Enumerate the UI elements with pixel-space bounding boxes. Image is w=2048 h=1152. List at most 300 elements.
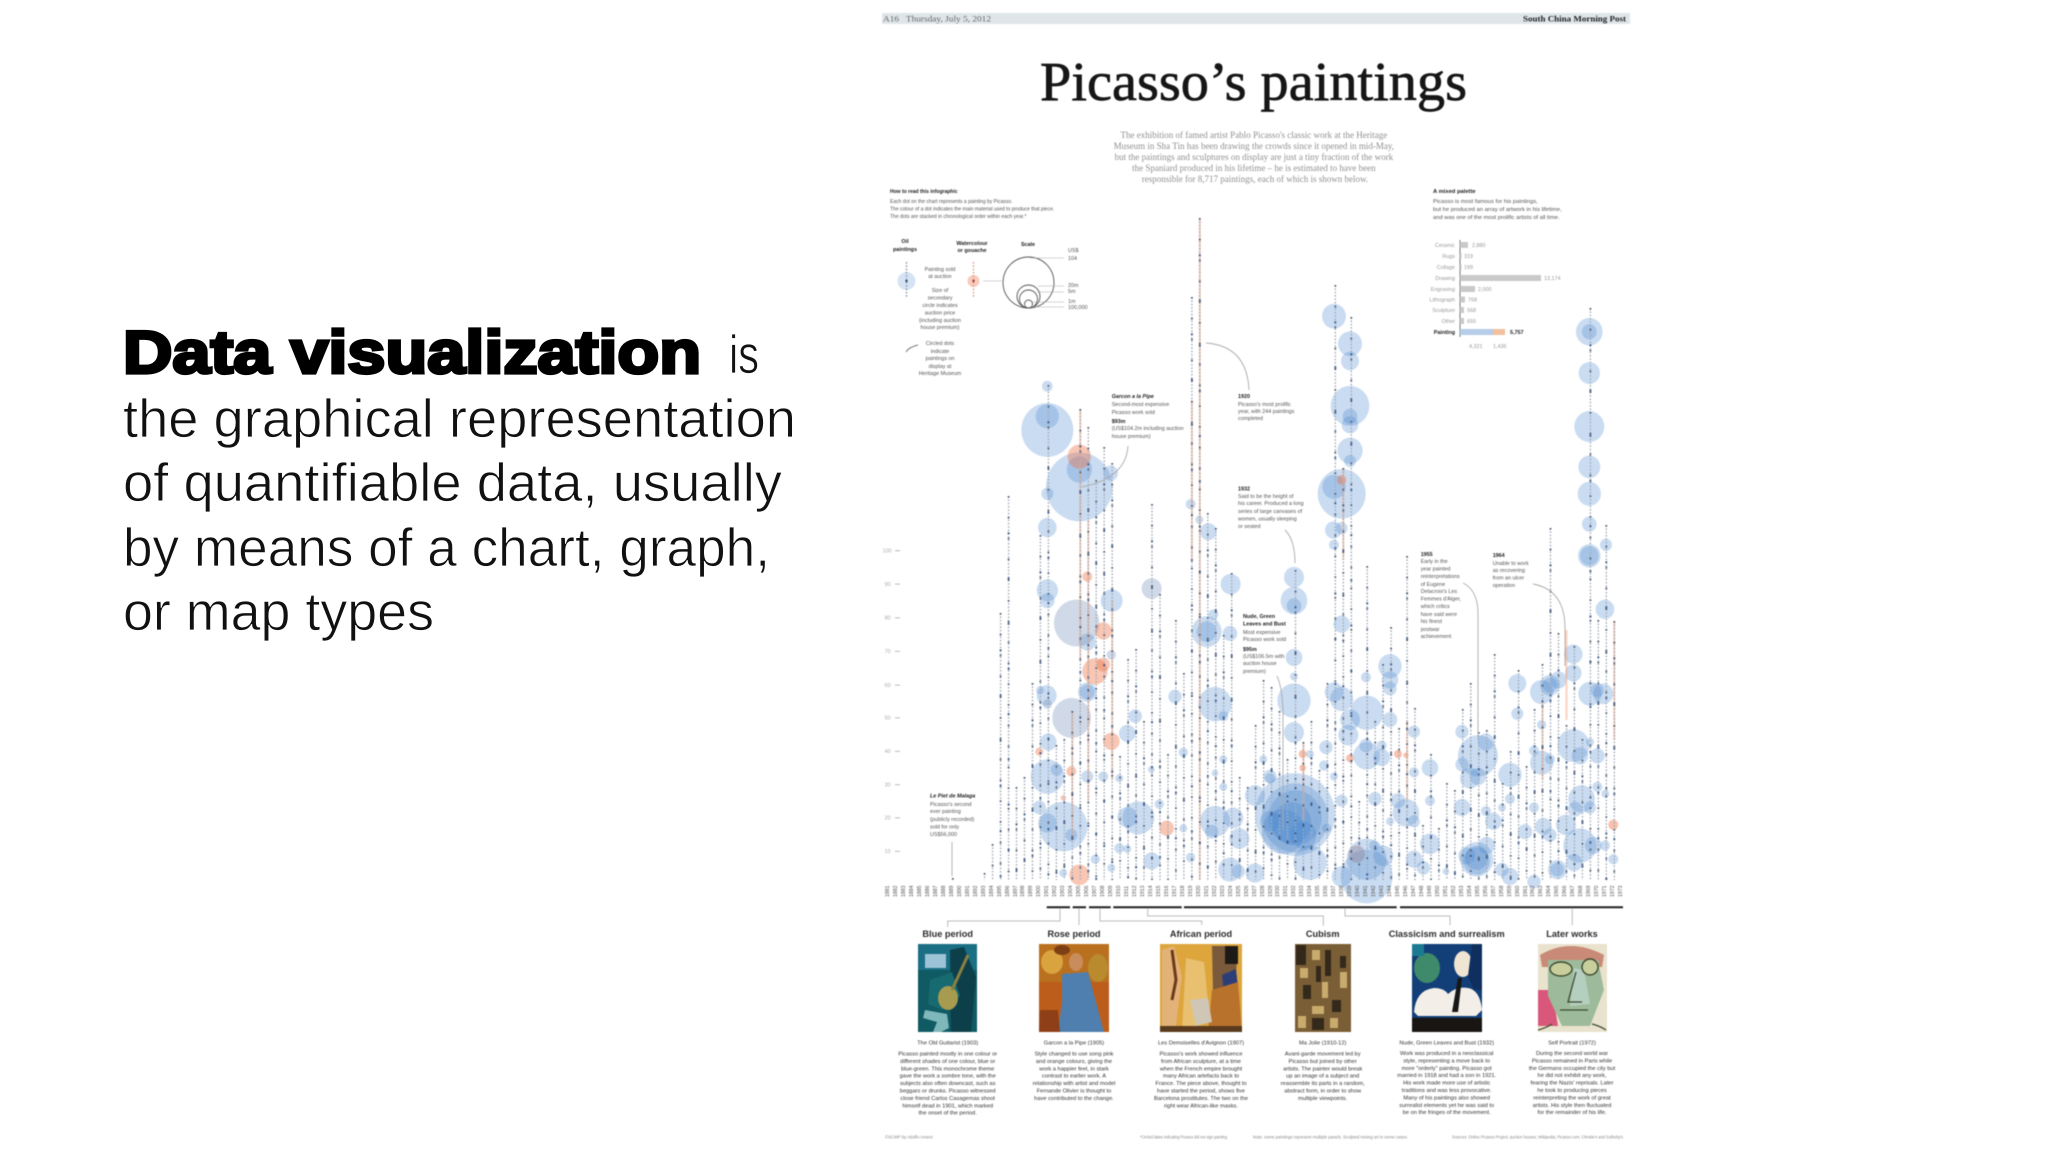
newspaper header bar xyxy=(882,13,1630,24)
year axis labels: 1971 xyxy=(1602,885,1608,897)
callout: Garcon a la Pipe xyxy=(1082,394,1184,487)
description: he took to producing pieces xyxy=(1537,1088,1607,1094)
callout: Le Piet de Malaga: US$56,000 xyxy=(930,832,957,838)
year axis labels: 1901 xyxy=(1044,885,1050,897)
description: Many of his paintings also showed xyxy=(1403,1095,1490,1101)
description: During the second world war xyxy=(1536,1051,1608,1057)
callout: 1964: 1964 xyxy=(1493,553,1505,559)
bar labels: Ceramic xyxy=(1435,243,1455,249)
icon: watercolour dot xyxy=(968,262,980,298)
year axis labels: 1965 xyxy=(1554,885,1560,897)
callout: 1920: year, with 244 paintings xyxy=(1238,409,1295,415)
year axis labels: 1962 xyxy=(1530,885,1536,897)
arrow: 1932 xyxy=(1285,530,1295,563)
callout: 1955: achievement xyxy=(1421,634,1452,640)
description: have contributed to the change. xyxy=(1034,1096,1114,1102)
description: have started the period, shows five xyxy=(1157,1088,1245,1094)
description: relationship with artist and model xyxy=(1033,1081,1115,1087)
year axis labels: 1916 xyxy=(1164,885,1170,897)
description: when the French empire brought xyxy=(1159,1066,1243,1072)
callout: Nude, Green Leaves and Bust: premium) xyxy=(1243,669,1266,675)
year axis labels: 1882 xyxy=(893,885,899,897)
description: the onset of the period. xyxy=(919,1111,977,1117)
callout: Nude, Green Leaves and Bust: (US$106.5m with xyxy=(1243,654,1284,660)
callout: Nude, Green Leaves and Bust: $95m xyxy=(1243,647,1257,653)
description: subjects also often downcast, such as xyxy=(900,1081,996,1087)
bar labels: Painting xyxy=(1434,330,1455,336)
description: and orange colours, giving the xyxy=(1036,1059,1112,1065)
description: Fernande Olivier is thought to xyxy=(1037,1088,1111,1094)
panel: African period xyxy=(1154,929,1248,1109)
description: different shades of one colour, blue or xyxy=(900,1059,995,1065)
year axis labels: 1898 xyxy=(1020,885,1026,897)
description: Work was produced in a neoclassical xyxy=(1400,1051,1493,1057)
painting: Ma Jolie xyxy=(1295,944,1351,1032)
arrow: 1964 xyxy=(1533,584,1565,666)
callout: 1964 xyxy=(1493,553,1565,666)
description: artists. The painter would break xyxy=(1283,1066,1362,1072)
mixed palette text: and was one of the most prolific artists of all time. xyxy=(1433,215,1560,221)
secondary circles: price bubbles right xyxy=(1255,304,1618,903)
description: reassemble its parts in a random, xyxy=(1281,1081,1365,1087)
year axis labels: 1963 xyxy=(1538,885,1544,897)
y axis: 100 xyxy=(883,548,892,554)
bar labels: Rugs xyxy=(1442,254,1455,260)
bold term: Data visualization xyxy=(123,319,701,386)
description: from African sculpture, at a time xyxy=(1161,1059,1241,1065)
callout: Le Piet de Malaga: sold for only xyxy=(930,824,959,830)
year axis labels: 1886 xyxy=(925,885,931,897)
description: surrealist elements yet he was said to xyxy=(1399,1103,1494,1109)
painting: Self Portrait xyxy=(1538,944,1607,1032)
definition line 4: by means of a chart, graph, xyxy=(123,518,770,578)
newspaper header bar: A16 Thursday, July 5, 2012 xyxy=(883,14,991,24)
description: Picasso but joined by other xyxy=(1289,1059,1357,1065)
year axis labels: 1902 xyxy=(1052,885,1058,897)
y axis: 80 xyxy=(885,616,891,622)
callout: Le Piet de Malaga: Le Piet de Malaga xyxy=(930,794,975,800)
scale circles xyxy=(983,257,1064,308)
intro text: Museum in Sha Tin has been drawing the crowds since it opened in mid-May, xyxy=(1114,141,1394,151)
bar labels: Engraving xyxy=(1431,287,1455,293)
year axis labels: 1883 xyxy=(901,885,907,897)
year axis labels: 1938 xyxy=(1339,885,1345,897)
year axis labels: 1926 xyxy=(1244,885,1250,897)
heading: African period xyxy=(1170,929,1232,939)
description: Picasso's work showed influence xyxy=(1160,1052,1242,1058)
scale labels: 1m xyxy=(1068,299,1076,305)
year axis labels: 1954 xyxy=(1467,885,1473,897)
callout: 1955: year painted xyxy=(1421,567,1450,573)
legend notes: auction price xyxy=(925,310,955,316)
year axis labels: 1940 xyxy=(1355,885,1361,897)
caption: The Old Guitarist (1903) xyxy=(917,1040,978,1046)
description: Picasso remained in Paris while xyxy=(1532,1058,1612,1064)
legend headings: Scale xyxy=(1021,242,1035,248)
year axis labels: 1928 xyxy=(1260,885,1266,897)
description: the Germans occupied the city but xyxy=(1529,1066,1616,1072)
bar values: 13,174 xyxy=(1544,276,1560,282)
description: more "orderly" painting. Picasso got xyxy=(1402,1066,1492,1072)
year axis labels: 1929 xyxy=(1268,885,1274,897)
scale labels: 20m xyxy=(1068,283,1079,289)
year axis labels: 1897 xyxy=(1012,885,1018,897)
year axis labels: 1918 xyxy=(1180,885,1186,897)
light blue bubbles right xyxy=(1255,304,1618,903)
year axis labels: 1945 xyxy=(1395,885,1401,897)
year axis labels: 1934 xyxy=(1307,885,1313,897)
bar values: 2,880 xyxy=(1472,243,1486,249)
year axis labels: 1919 xyxy=(1188,885,1194,897)
light blue bubbles xyxy=(1021,381,1275,883)
callout: 1932: women, usually sleeping xyxy=(1237,516,1297,522)
year axis labels: 1915 xyxy=(1156,885,1162,897)
description: beggars or drunks. Picasso witnessed xyxy=(900,1088,996,1094)
year axis labels: 1885 xyxy=(917,885,923,897)
panel: Classicism and surrealism xyxy=(1389,929,1505,1116)
description: be on the fringes of the movement. xyxy=(1403,1110,1491,1116)
period timeline bars xyxy=(1047,906,1623,908)
description: he did not exhibit any work, xyxy=(1538,1073,1607,1079)
scale labels: 104 xyxy=(1068,256,1077,262)
legend notes: Size of xyxy=(932,288,949,294)
year axis labels: 1956 xyxy=(1483,885,1489,897)
callout: Nude, Green Leaves and Bust: auction house xyxy=(1243,661,1277,667)
panel: Cubism xyxy=(1281,929,1365,1102)
year axis labels: 1944 xyxy=(1387,885,1393,897)
callout: Nude, Green Leaves and Bust: Nude, Green xyxy=(1243,614,1275,620)
legend notes: Heritage Museum xyxy=(919,371,962,377)
legend notes: secondary xyxy=(928,296,953,302)
description: His work made more use of artistic xyxy=(1403,1081,1490,1087)
heading: Cubism xyxy=(1306,929,1340,939)
year axis labels: 1913 xyxy=(1140,885,1146,897)
year axis labels: 1920 xyxy=(1196,885,1202,897)
year axis labels: 1947 xyxy=(1411,885,1417,897)
year axis labels: 1953 xyxy=(1459,885,1465,897)
year axis labels: 1966 xyxy=(1562,885,1568,897)
intro text: responsible for 8,717 paintings, each of which is shown below. xyxy=(1142,174,1368,184)
description: artists. His style then fluctuated xyxy=(1533,1103,1611,1109)
callout: 1932: or seated xyxy=(1238,524,1260,530)
legend notes: display at xyxy=(929,364,952,370)
callout: 1920 xyxy=(1206,343,1295,422)
description: right wear African-like masks. xyxy=(1164,1103,1238,1109)
chart: dot columns by year xyxy=(883,218,1618,903)
secondary circles: price bubbles upper left xyxy=(1021,381,1275,885)
description: Picasso painted mostly in one colour or xyxy=(898,1052,997,1058)
legend notes: Circled dots xyxy=(926,341,955,347)
y axis: 30 xyxy=(885,782,891,789)
year axis labels: 1935 xyxy=(1315,885,1321,897)
caption: Garcon a la Pipe (1905) xyxy=(1044,1040,1104,1046)
year axis labels: 1922 xyxy=(1212,885,1218,897)
heading: Rose period xyxy=(1047,929,1101,939)
bar labels: Lithograph xyxy=(1430,298,1455,304)
year axis labels: 1910 xyxy=(1116,885,1122,897)
callout: Le Piet de Malaga: Picasso's second xyxy=(930,802,971,808)
footnote: sources: Sources: Online Picasso Project; auction houses; Wikipedia; Picasso.com; Christie's and Sotheby's xyxy=(1452,1134,1624,1140)
dark dots xyxy=(953,218,1614,880)
year axis labels: 1972 xyxy=(1610,885,1616,897)
year axis labels: 1904 xyxy=(1068,885,1074,897)
painting bar xyxy=(1460,329,1505,335)
bar values: 5,757 xyxy=(1510,330,1524,336)
heading: Later works xyxy=(1546,929,1598,939)
orange bubbles xyxy=(1035,444,1174,885)
callout: Nude, Green Leaves and Bust xyxy=(1243,614,1286,830)
year axis labels: 1958 xyxy=(1499,885,1505,897)
heading: Classicism and surrealism xyxy=(1389,929,1505,939)
callout: 1964: operation xyxy=(1493,583,1515,589)
bar values: 768 xyxy=(1468,298,1477,304)
legend notes: circle indicates xyxy=(922,303,958,309)
year axis labels: 1900 xyxy=(1036,885,1042,897)
legend notes: Painting sold xyxy=(925,267,955,273)
y axis: 20 xyxy=(885,816,891,822)
callout: Garcon a la Pipe: (US$104.2m including auction xyxy=(1112,426,1184,432)
intro text: the Spaniard produced in his lifetime – he is estimated to have been xyxy=(1132,163,1376,173)
year axis labels: 1903 xyxy=(1060,885,1066,897)
year axis labels: 1941 xyxy=(1363,885,1369,897)
how to read text: How to read this infographic xyxy=(890,189,958,195)
year axis labels: 1917 xyxy=(1172,885,1178,897)
callout: 1955: Delacroix's Les xyxy=(1421,589,1457,595)
year axis labels: 1892 xyxy=(973,885,979,897)
description: work a happier feel, in stark xyxy=(1038,1066,1109,1072)
y axis: 50 xyxy=(885,716,891,722)
dark dots offset xyxy=(953,218,1614,880)
arrow: Le Piet xyxy=(951,842,953,876)
year axis labels: 1939 xyxy=(1347,885,1353,897)
description: multiple viewpoints. xyxy=(1298,1096,1348,1102)
panel: Blue period xyxy=(898,929,997,1117)
callout: 1964: as recovering xyxy=(1493,568,1525,574)
year axis labels: 1899 xyxy=(1028,885,1034,897)
year axis labels: 1893 xyxy=(981,885,987,897)
description: contrast to earlier work. A xyxy=(1042,1074,1106,1080)
description: for the remainder of his life. xyxy=(1538,1110,1607,1116)
year axis labels: 1946 xyxy=(1403,885,1409,897)
icon: oil painting dot xyxy=(898,262,916,298)
caption: Self Portrait (1972) xyxy=(1548,1040,1596,1046)
arrow: Garcon a la Pipe xyxy=(1082,446,1128,487)
year axis labels: 1881 xyxy=(885,885,891,897)
year axis labels: 1949 xyxy=(1427,885,1433,897)
callout: 1920: Picasso's most prolific xyxy=(1238,402,1291,408)
y axis xyxy=(883,548,900,855)
footnote: note: Note: some paintings represent multiple panels. Sculpted mixing art in some cases. xyxy=(1253,1134,1408,1140)
callout: 1920: completed xyxy=(1238,416,1263,422)
arrow: Nude xyxy=(1277,676,1283,830)
year axis labels: 1891 xyxy=(965,885,971,897)
panel: Rose period xyxy=(1033,929,1115,1102)
bar chart: mixed palette xyxy=(1430,240,1560,350)
callout: Nude, Green Leaves and Bust: Leaves and Bust xyxy=(1243,622,1286,628)
y axis: 10 xyxy=(885,849,891,855)
bar values: 568 xyxy=(1467,308,1476,314)
description: close friend Carlos Casagemas shoot xyxy=(900,1096,995,1102)
bar values: 655 xyxy=(1467,319,1476,325)
legend headings: Watercolour xyxy=(956,241,989,247)
year axis labels: 1973 xyxy=(1618,885,1624,897)
title: Picasso’s paintings xyxy=(1040,51,1467,112)
callout: 1955 xyxy=(1420,552,1478,739)
bar labels: Collage xyxy=(1437,265,1455,271)
callout: Le Piet de Malaga: (publicly recorded) xyxy=(930,817,975,823)
painting: Les Demoiselles d'Avignon xyxy=(1160,944,1242,1032)
callout: 1920: 1920 xyxy=(1238,394,1250,400)
bar labels: Other xyxy=(1442,319,1455,325)
definition line 3: of quantifiable data, usually xyxy=(123,453,782,513)
painting: The Old Guitarist xyxy=(918,944,977,1032)
bar values: 319 xyxy=(1464,254,1473,260)
callout: Garcon a la Pipe: Second-most expensive xyxy=(1112,402,1169,408)
callout: 1955: have said were xyxy=(1421,612,1457,618)
painting: Nude, Green Leaves and Bust xyxy=(1412,944,1482,1032)
callout: 1955: which critics xyxy=(1420,604,1450,610)
year axis labels: 1895 xyxy=(997,885,1003,897)
year axis labels: 1894 xyxy=(989,885,995,897)
year axis labels: 1968 xyxy=(1578,885,1584,897)
year axis labels: 1911 xyxy=(1124,886,1130,897)
legend headings: paintings xyxy=(893,247,917,253)
painting: Garcon a la Pipe xyxy=(1039,944,1109,1032)
y axis: 40 xyxy=(885,749,891,755)
year axis labels: 1884 xyxy=(909,885,915,897)
panel: Later works xyxy=(1529,929,1616,1116)
bar values: 1,436 xyxy=(1493,344,1506,350)
year axis labels: 1948 xyxy=(1419,885,1425,897)
how to read text: Each dot on the chart represents a painting by Picasso. xyxy=(890,199,1013,205)
arrow: 1955 xyxy=(1463,583,1478,739)
mixed palette text: A mixed palette xyxy=(1433,189,1476,195)
description: up an image of a subject and xyxy=(1286,1074,1359,1080)
definition line 1: is xyxy=(729,325,759,385)
year axis labels: 1908 xyxy=(1100,885,1106,897)
year axis labels: 1970 xyxy=(1594,885,1600,897)
year axis labels: 1909 xyxy=(1108,885,1114,897)
year axis labels: 1923 xyxy=(1220,885,1226,897)
callout: Nude, Green Leaves and Bust: Picasso work sold xyxy=(1243,637,1286,643)
period connectors xyxy=(948,908,1572,927)
red bubbles right xyxy=(1299,475,1618,830)
description: Barcelona prostitutes. The two on the xyxy=(1154,1096,1248,1102)
callout: 1955: 1955 xyxy=(1421,552,1433,558)
definition line 5: or map types xyxy=(123,582,434,642)
bar labels: Drawing xyxy=(1435,276,1455,282)
bar values: 4,321 xyxy=(1469,344,1482,350)
caption: Ma Jolie (1910-12) xyxy=(1299,1040,1347,1046)
year axis labels: 1957 xyxy=(1491,885,1497,897)
caption: Nude, Green Leaves and Bust (1932) xyxy=(1399,1040,1494,1046)
year axis labels: 1937 xyxy=(1331,885,1337,897)
scale labels: US$ xyxy=(1068,248,1078,254)
description: reinterpreting the work of great xyxy=(1533,1095,1611,1101)
arrow: 1920 xyxy=(1206,343,1249,390)
year axis labels: 1936 xyxy=(1323,885,1329,897)
callout: 1955: Femmes d'Alger, xyxy=(1421,597,1461,603)
description: married in 1918 and had a son in 1921. xyxy=(1397,1073,1497,1079)
year axis labels: 1964 xyxy=(1546,885,1552,897)
definition text block xyxy=(123,319,796,642)
y axis: 60 xyxy=(885,683,891,689)
year axis labels: 1925 xyxy=(1236,885,1242,897)
intro text: but the paintings and sculptures on display are just a tiny fraction of the work xyxy=(1115,152,1394,162)
callout: 1955: his finest xyxy=(1421,619,1442,625)
icon: circled dot pointer xyxy=(906,345,918,352)
callout: 1955: of Eugene xyxy=(1421,582,1445,588)
callout: 1932: his career. Produced a long xyxy=(1238,501,1304,507)
newspaper header bar: South China Morning Post xyxy=(1523,14,1626,24)
year axis labels: 1905 xyxy=(1076,885,1082,897)
year axis labels: 1927 xyxy=(1252,885,1258,897)
callout: 1955: postwar xyxy=(1421,627,1440,633)
description: many African artefacts back to xyxy=(1163,1074,1239,1080)
legend headings: or gouache xyxy=(957,248,987,254)
y axis: 70 xyxy=(885,649,891,655)
callout: 1932: Said to be the height of xyxy=(1238,494,1294,500)
bar values: 199 xyxy=(1464,265,1473,271)
y axis: 90 xyxy=(885,582,891,588)
callout: 1955: reinterpretations xyxy=(1421,574,1460,580)
year axis labels: 1896 xyxy=(1005,885,1011,897)
callout: Le Piet de Malaga xyxy=(930,794,975,876)
intro text: The exhibition of famed artist Pablo Picasso's classic work at the Heritage xyxy=(1120,130,1387,140)
description: style, representing a move back to xyxy=(1403,1058,1490,1064)
description: France. The piece above, thought to xyxy=(1155,1081,1247,1087)
year axis labels: 1960 xyxy=(1515,885,1521,897)
year axis labels: 1951 xyxy=(1443,885,1449,897)
mixed palette text: but he produced an array of artwork in his lifetime, xyxy=(1433,207,1562,213)
orange tinted column segments xyxy=(1072,218,1614,880)
callout: 1932 xyxy=(1237,486,1304,563)
footnotes xyxy=(885,1134,1624,1140)
legend notes: at auction xyxy=(928,274,952,280)
description: blue-green. This monochrome theme xyxy=(901,1066,994,1072)
grey blue bubbles xyxy=(1043,578,1162,738)
callout: 1932: series of large canvases of xyxy=(1238,509,1303,515)
panel: Picasso infographic page xyxy=(882,13,1630,1140)
year axis labels: 1887 xyxy=(933,885,939,897)
callout: Le Piet de Malaga: ever painting xyxy=(930,809,961,815)
callout: 1964: Unable to work xyxy=(1493,561,1529,567)
caption: Les Demoiselles d'Avignon (1907) xyxy=(1158,1040,1244,1046)
year axis labels: 1924 xyxy=(1228,885,1234,897)
year axis labels: 1943 xyxy=(1379,885,1385,897)
description: gave the work a sombre tone, with the xyxy=(900,1074,996,1080)
footnote: circled dates: *Circled dates indicating Picasso did not sign painting xyxy=(1140,1134,1227,1140)
year axis labels: 1969 xyxy=(1586,885,1592,897)
legend notes: paintings on xyxy=(925,356,955,362)
callout: 1964: from an ulcer xyxy=(1493,576,1524,582)
description: traditions and was less provocative. xyxy=(1402,1088,1492,1094)
bar labels: Sculpture xyxy=(1432,308,1455,314)
callout: Garcon a la Pipe: house premium) xyxy=(1112,434,1151,440)
how to read text: The dots are stacked in chronological order within each year.* xyxy=(890,214,1027,220)
credit: ©SCMP by Adolfo Arranz xyxy=(885,1134,934,1140)
year axis labels: 1914 xyxy=(1148,885,1154,897)
year axis labels: 1921 xyxy=(1204,885,1210,897)
year axis labels: 1950 xyxy=(1435,885,1441,897)
year axis labels xyxy=(884,885,1624,897)
year axis labels: 1932 xyxy=(1291,885,1297,897)
callout: 1955: Early in the xyxy=(1421,559,1448,565)
scale labels: 100,000 xyxy=(1068,305,1088,311)
year axis labels: 1888 xyxy=(941,885,947,897)
description: Style changed to use song pink xyxy=(1034,1052,1114,1058)
legend notes: house premium) xyxy=(921,325,960,331)
